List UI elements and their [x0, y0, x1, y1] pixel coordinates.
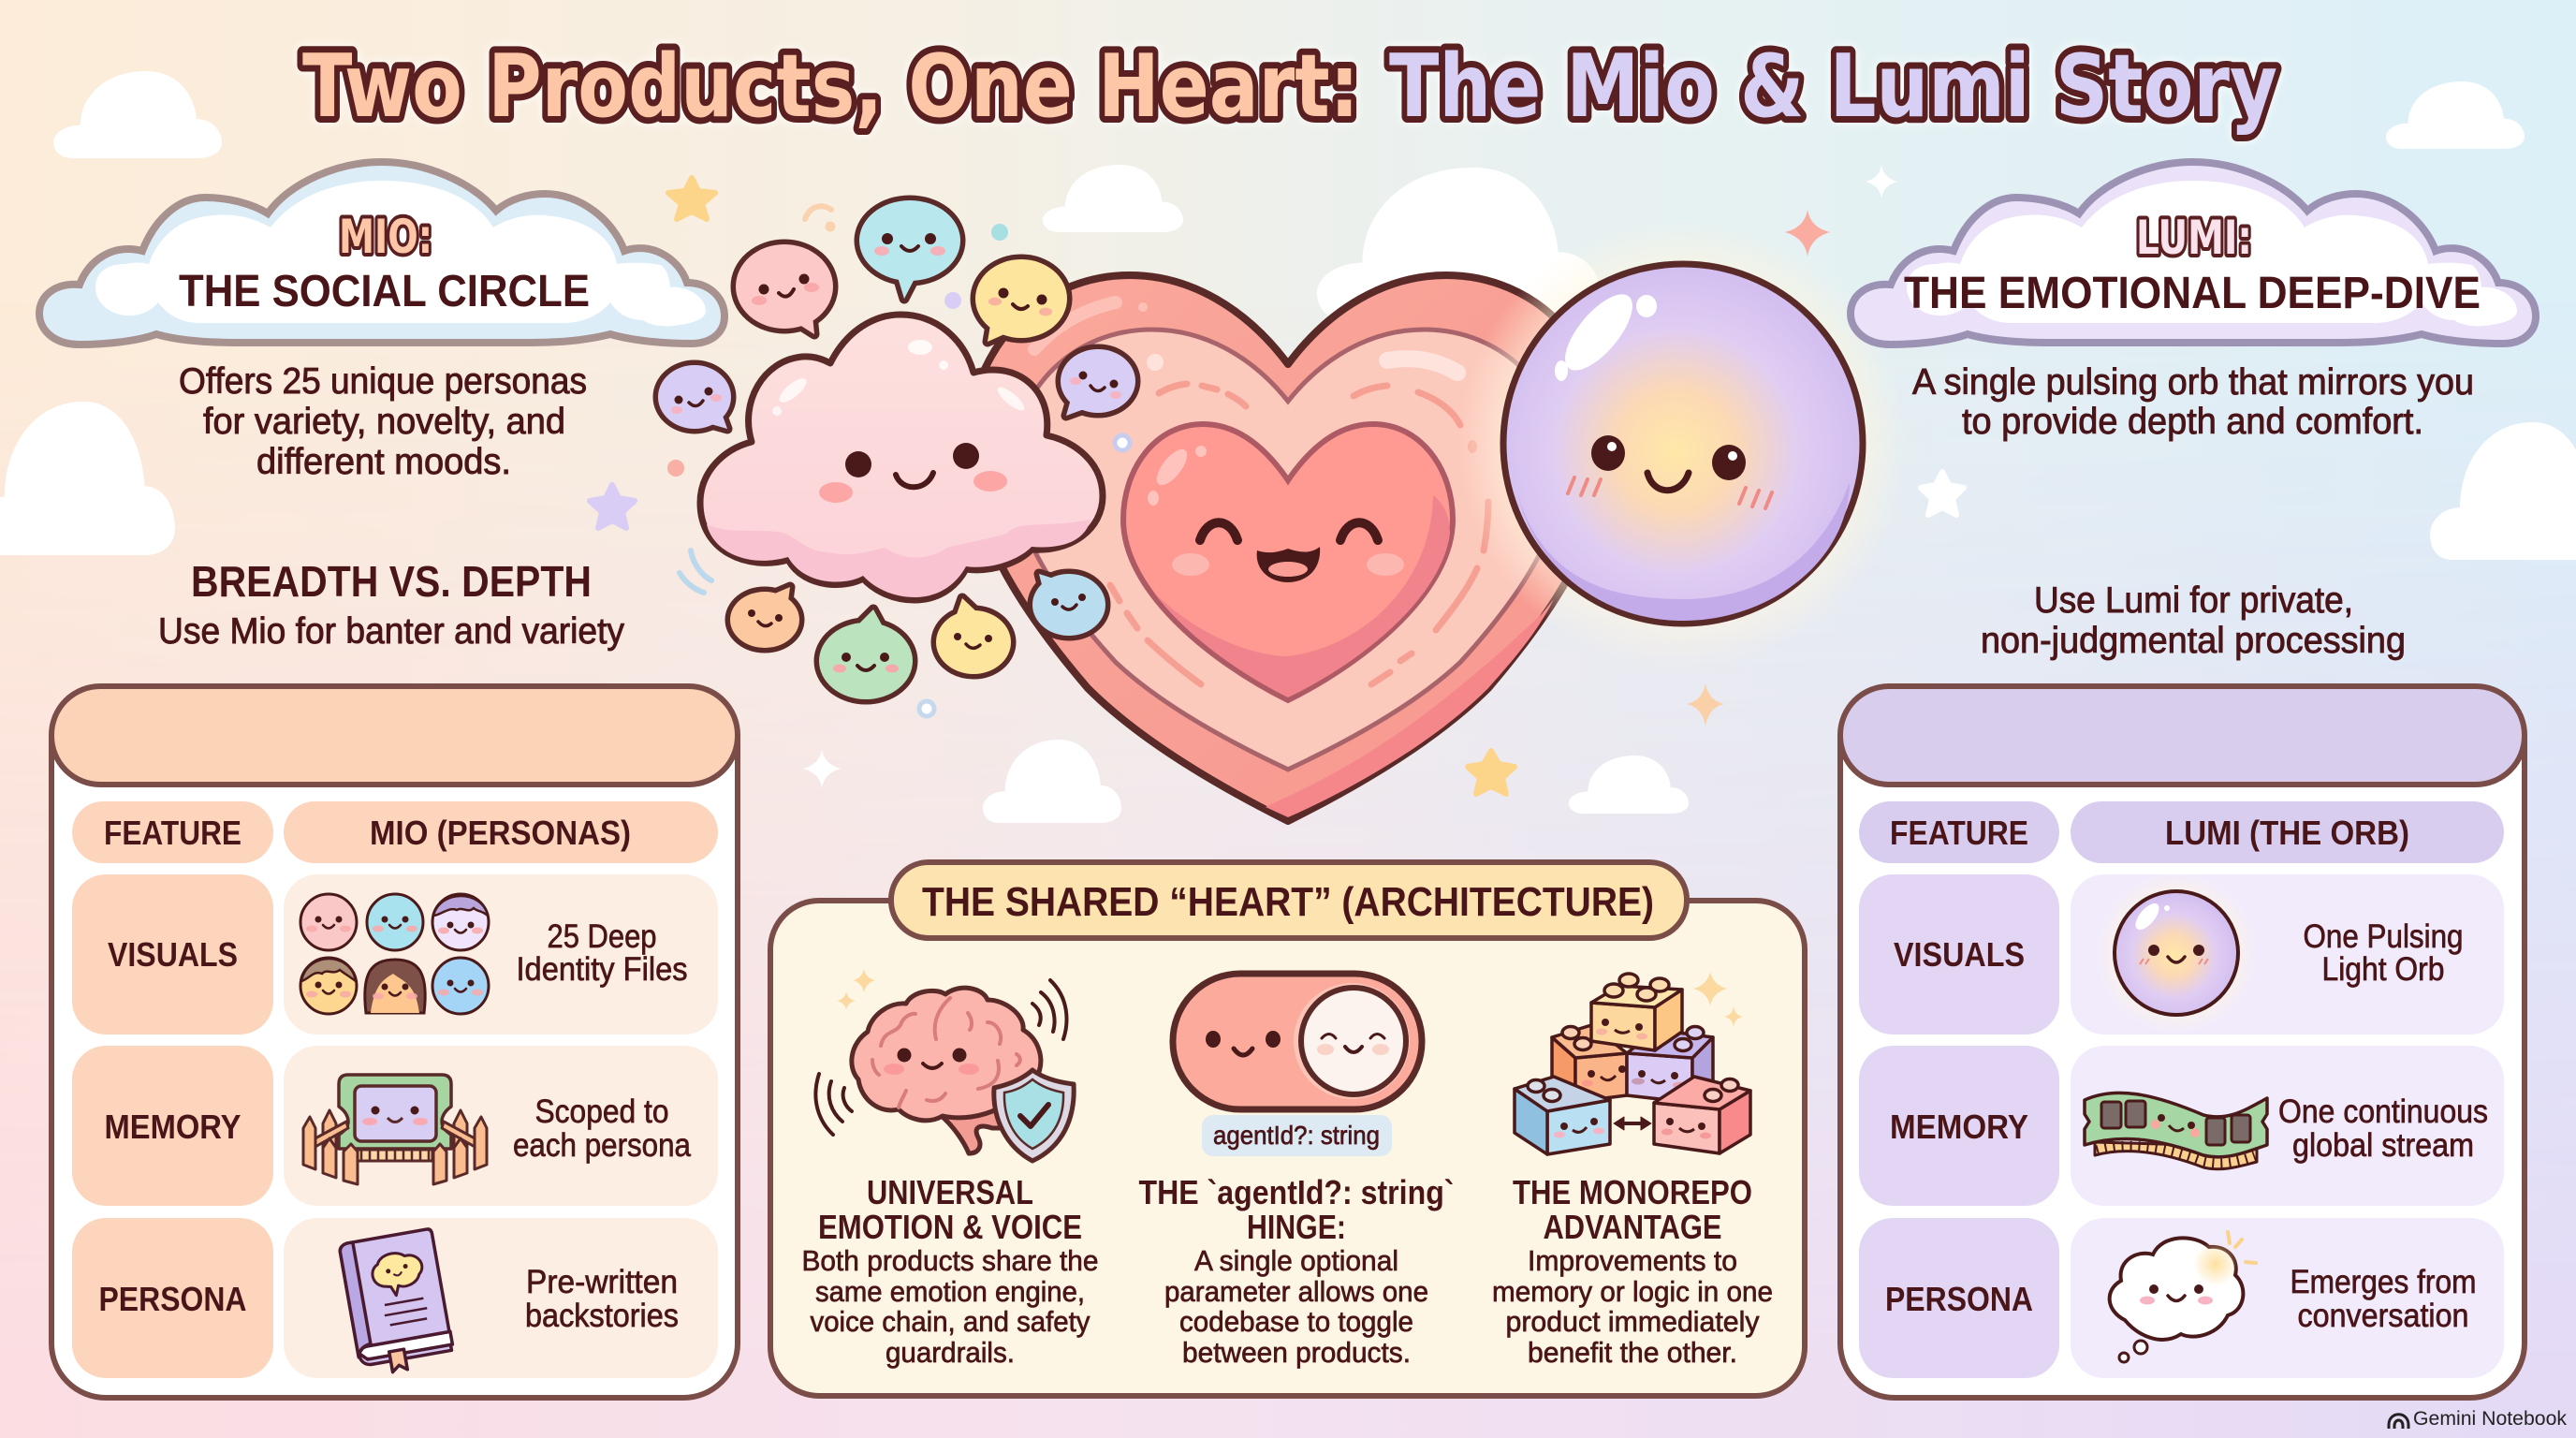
Mio row: memory	[72, 1046, 718, 1206]
text: agentId hinge: parameter allows one	[1164, 1275, 1428, 1308]
text: universal emotion and voice: voice chain, and safety	[811, 1305, 1090, 1338]
Lumi label: LUMI:	[2136, 211, 2252, 265]
Lumi row: persona: PERSONA	[1885, 1280, 2033, 1318]
Mio header row: MIO (PERSONAS)	[370, 814, 631, 852]
text: agentId hinge	[1138, 1173, 1455, 1369]
Lumi subtitle: THE EMOTIONAL DEEP-DIVE	[1904, 269, 2481, 318]
text: agentId hinge: THE `agentId?: string`	[1138, 1173, 1455, 1211]
Mio table header band	[51, 686, 738, 785]
Mio row: persona: PERSONA	[99, 1280, 247, 1318]
Lumi row: memory	[1859, 1046, 2504, 1206]
Mio row: persona	[72, 1218, 718, 1378]
icon: yellow speech bubble	[975, 259, 1067, 342]
text: universal emotion and voice: EMOTION & VOICE	[818, 1208, 1082, 1246]
architecture heading pill: THE SHARED “HEART” (ARCHITECTURE)	[922, 879, 1654, 925]
Lumi row: persona	[1859, 1218, 2504, 1378]
text: Mio description: Offers 25 unique personas	[179, 361, 587, 402]
watermark: Gemini Notebook: Gemini Notebook	[2413, 1408, 2568, 1430]
text: agentId hinge: between products.	[1182, 1336, 1411, 1369]
icon: glowing Lumi orb	[1458, 219, 1908, 668]
Lumi row: persona: Emerges from	[2290, 1264, 2477, 1300]
title: Two Products, One Heart:	[302, 36, 1359, 137]
text: monorepo advantage: Improvements to	[1528, 1244, 1737, 1277]
Lumi header row	[1859, 801, 2504, 863]
Mio row: visuals: Identity Files	[517, 951, 687, 988]
heading: breadth vs depth: BREADTH VS. DEPTH	[191, 557, 592, 606]
text: universal emotion and voice	[801, 1173, 1099, 1369]
label: agentId string: agentId?: string	[1213, 1121, 1380, 1150]
icon: second blue speech bubble	[1032, 574, 1105, 636]
Lumi table header band	[1840, 686, 2525, 785]
decorative background clouds	[0, 71, 2576, 823]
Lumi row: visuals: Light Orb	[2321, 951, 2445, 988]
Lumi row: visuals: One Pulsing	[2303, 918, 2464, 955]
icon: storybook	[339, 1228, 456, 1377]
icon: orange speech bubble	[730, 587, 799, 648]
text: Mio description	[179, 361, 587, 482]
text: Lumi description	[1912, 362, 2474, 442]
Lumi row: memory: MEMORY	[1890, 1108, 2028, 1146]
icon: agentId toggle switch	[1173, 974, 1422, 1109]
Mio row: persona: backstories	[525, 1298, 679, 1334]
text: universal emotion and voice: Both products share the	[801, 1244, 1099, 1277]
icon: memory chip with fence	[303, 1075, 487, 1184]
text: monorepo advantage: ADVANTAGE	[1543, 1208, 1722, 1246]
panel: Mio comparison table	[51, 686, 738, 1398]
text: universal emotion and voice: same emotion engine,	[815, 1275, 1085, 1308]
Lumi row: memory: global stream	[2292, 1127, 2474, 1164]
text: Lumi usage: non-judgmental processing	[1981, 621, 2406, 661]
text: agentId hinge: A single optional	[1194, 1244, 1398, 1277]
title	[302, 36, 2277, 137]
text: monorepo advantage: memory or logic in one	[1492, 1275, 1773, 1308]
text: Mio usage: Use Mio for banter and variety	[158, 611, 624, 652]
text: agentId hinge: codebase to toggle	[1179, 1305, 1413, 1338]
text: Lumi usage	[1981, 580, 2406, 661]
text: monorepo advantage: THE MONOREPO	[1513, 1173, 1752, 1211]
decorative stars, sparkles and dots	[590, 165, 1964, 794]
text: monorepo advantage: benefit the other.	[1528, 1336, 1737, 1369]
Lumi row: visuals: VISUALS	[1894, 935, 2025, 974]
Mio row: visuals: 25 Deep	[547, 918, 657, 955]
text: universal emotion and voice: guardrails.	[886, 1336, 1015, 1369]
Mio row: memory: MEMORY	[105, 1108, 242, 1146]
icon: pink cloud character	[700, 315, 1103, 600]
Lumi row: visuals	[1859, 873, 2504, 1034]
Mio row: persona: Pre-written	[526, 1264, 678, 1300]
Mio subtitle: THE SOCIAL CIRCLE	[179, 267, 590, 316]
Mio label: MIO:	[339, 210, 432, 264]
Lumi row: persona: conversation	[2297, 1298, 2469, 1334]
Lumi header row: FEATURE	[1890, 814, 2028, 852]
icon: persona faces grid	[300, 894, 489, 1014]
Lumi row: memory: One continuous	[2278, 1093, 2488, 1130]
Mio row: visuals: VISUALS	[108, 935, 238, 974]
Lumi header row: LUMI (THE ORB)	[2165, 814, 2409, 852]
Mio header row: FEATURE	[104, 814, 242, 852]
panel: Mio heading cloud	[39, 162, 724, 345]
panel: Lumi comparison table	[1840, 686, 2525, 1398]
icon: wavy memory stick	[2085, 1093, 2267, 1169]
icon: purple speech bubble left	[658, 365, 731, 429]
text: agentId hinge: HINGE:	[1247, 1208, 1346, 1246]
text: monorepo advantage: product immediately	[1505, 1305, 1760, 1338]
panel: shared heart architecture	[770, 862, 1805, 1396]
text: Lumi description: to provide depth and comfort.	[1962, 402, 2423, 442]
icon: pink speech bubble	[736, 244, 833, 334]
architecture heading pill	[891, 862, 1687, 938]
Mio row: memory: each persona	[513, 1127, 691, 1164]
Mio row: memory: Scoped to	[535, 1093, 668, 1130]
icon: building blocks	[1515, 972, 1750, 1154]
panel: Lumi heading cloud	[1851, 162, 2536, 345]
text: Mio description: for variety, novelty, and	[203, 402, 565, 442]
text: Lumi usage: Use Lumi for private,	[2034, 580, 2353, 621]
text: universal emotion and voice: UNIVERSAL	[867, 1173, 1033, 1211]
icon: second yellow speech bubble	[936, 598, 1011, 674]
icon: purple speech bubble right	[1061, 349, 1135, 416]
icon: thought cloud	[2110, 1232, 2256, 1362]
Mio row: visuals	[72, 874, 718, 1034]
title: The Mio & Lumi Story	[1389, 36, 2277, 137]
icon: mini orb	[2096, 873, 2257, 1034]
icon: heart character	[968, 275, 1608, 821]
text: monorepo advantage	[1492, 1173, 1773, 1369]
icon: green speech bubble	[819, 609, 913, 699]
icon: brain with shield	[815, 969, 1074, 1161]
text: Mio description: different moods.	[256, 442, 511, 482]
text: Lumi description: A single pulsing orb that mirrors you	[1912, 362, 2474, 403]
label: agentId string	[1202, 1115, 1392, 1156]
Mio header row	[72, 801, 718, 863]
icon: blue speech bubble	[859, 200, 960, 299]
